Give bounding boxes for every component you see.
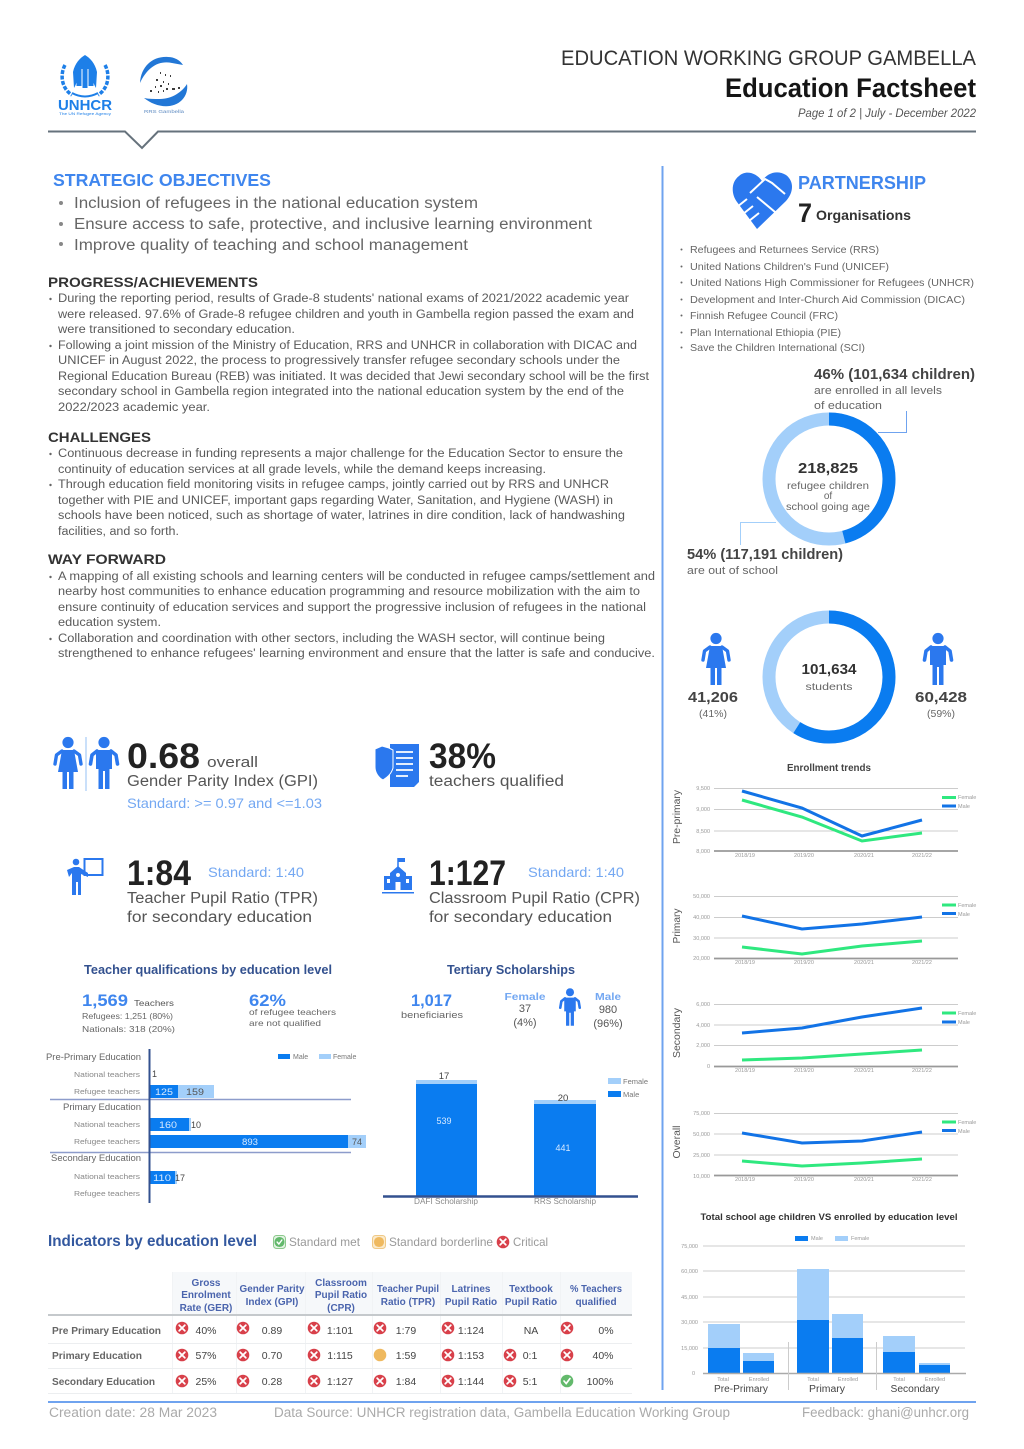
logo: RRS <box>140 57 187 114</box>
table row: pre-primary: 1:124 <box>458 1325 484 1337</box>
table row: primary: 1:115 <box>327 1350 353 1362</box>
text: challenge items: together with PIE and UNICEF, important gaps regarding Water, Sanitation, and Hygiene (WASH) in <box>58 495 613 507</box>
chart: teachers by level and sex: National teachers <box>74 1070 140 1079</box>
donut centre label <box>802 662 856 693</box>
chart: overall trend: 2018/19 <box>735 1177 755 1183</box>
table: indicators <box>48 1272 632 1394</box>
callout: enrolled: of education <box>814 400 882 412</box>
stat: beneficiaries: 1,017 <box>411 991 452 1010</box>
chart: total school age children vs enrolled: 15,000 <box>681 1346 698 1352</box>
donut centre label: school going age <box>786 502 870 513</box>
panel: teacher qualifications <box>46 963 366 1203</box>
icon: handshake heart <box>733 172 792 229</box>
legend: status key: Critical <box>513 1235 548 1249</box>
text: challenge items: facilities, and so forth. <box>58 526 179 538</box>
stat: organisations <box>798 198 911 228</box>
chart: primary trend: 2020/21 <box>854 960 874 966</box>
chart: secondary trend: 2020/21 <box>854 1068 874 1074</box>
icon: female and male <box>55 737 118 791</box>
table header row: Textbook <box>509 1284 553 1295</box>
chart: primary trend: Primary <box>672 908 683 944</box>
chart: pre-primary trend: 2021/22 <box>912 853 932 859</box>
table header row: Latrines <box>452 1284 491 1295</box>
table row: pre-primary: 40% <box>195 1325 217 1337</box>
heading: partnership: PARTNERSHIP <box>798 173 926 193</box>
objectives list: Inclusion of refugees in the national education system <box>74 195 478 212</box>
logo: RRS: RRS Gambella <box>144 109 185 114</box>
table row: secondary <box>52 1375 613 1388</box>
stat: gender parity index <box>55 737 322 811</box>
heading: strategic objectives: STRATEGIC OBJECTIVES <box>53 170 271 190</box>
table header row: Pupil Ratio <box>445 1297 497 1308</box>
stat: male scholars: 980 <box>599 1004 617 1016</box>
table row: primary: 0:1 <box>523 1350 537 1362</box>
chart: scholarship bars: 441 <box>555 1143 571 1153</box>
text: way forward items <box>49 571 655 660</box>
text: progress items <box>49 293 650 414</box>
stat: classroom pupil ratio: for secondary education <box>429 909 612 926</box>
chart: primary trend: Male <box>958 912 970 918</box>
stat: male scholars <box>593 991 623 1030</box>
callout: enrolled: 46% (101,634 children) <box>814 367 975 383</box>
chart: primary trend <box>672 894 976 966</box>
stat: gender parity index: Standard: >= 0.97 and <=1.03 <box>127 795 322 811</box>
table header row: Enrolment <box>181 1290 231 1301</box>
stat: teacher pupil ratio: for secondary education <box>127 909 312 926</box>
callout: enrolled: are enrolled in all levels <box>814 385 943 397</box>
chart: total school age children vs enrolled: Total <box>717 1377 729 1383</box>
stat: female scholars: (4%) <box>513 1017 537 1029</box>
heading: challenges: CHALLENGES <box>48 429 151 445</box>
chart: teachers by level and sex: Refugee teachers <box>74 1087 140 1096</box>
chart: total school age children vs enrolled: Total <box>807 1377 819 1383</box>
stat: teacher pupil ratio: Teacher Pupil Ratio (TPR) <box>127 890 318 907</box>
footer: data source: Data Source: UNHCR registration data, Gambella Education Working Group <box>274 1405 730 1420</box>
chart: teachers by level and sex <box>46 1049 366 1203</box>
chart: teachers by level and sex: Secondary Education <box>51 1153 141 1163</box>
chart: scholarship bars <box>383 1071 648 1206</box>
chart: enrolled vs out of school donut <box>769 419 889 539</box>
objectives list: Improve quality of teaching and school management <box>74 237 469 254</box>
chart: total school age children vs enrolled: Enrolled <box>838 1377 858 1383</box>
stat: female students <box>688 690 738 720</box>
text: way forward items: education system. <box>58 617 161 629</box>
chart: secondary trend: Male <box>958 1020 970 1026</box>
chart: scholarship bars: DAFI Scholarship <box>414 1197 479 1206</box>
callout: out of school: 54% (117,191 children) <box>687 547 843 563</box>
list: partner organisations: United Nations High Commissioner for Refugees (UNHCR) <box>690 277 974 289</box>
bars: primary <box>797 1269 863 1373</box>
chart legend: Female <box>333 1054 356 1061</box>
stat: male scholars: Male <box>595 991 621 1003</box>
stat: unqualified refugee teachers: of refugee teachers <box>249 1007 336 1017</box>
chart: total school age children vs enrolled: 60,000 <box>681 1269 698 1275</box>
callout: out of school: are out of school <box>687 565 778 577</box>
chart legend <box>278 1054 356 1061</box>
chart: overall trend: Female <box>958 1120 976 1126</box>
icon: shield and document <box>375 744 419 787</box>
chart: secondary trend: 4,000 <box>696 1023 710 1029</box>
stat: female students: 41,206 <box>688 690 738 706</box>
heading: enrollment trends: Enrollment trends <box>787 763 871 774</box>
bars: secondary <box>883 1336 950 1373</box>
stat: gender parity index: 0.68 <box>127 737 200 776</box>
text: way forward items: A mapping of all existing schools and learning centers will be conducted in refugee camps/settlement and <box>58 571 655 583</box>
chart: secondary trend: 0 <box>707 1064 710 1070</box>
chart: pre-primary trend: 2019/20 <box>794 853 814 859</box>
chart: students by sex donut <box>769 617 889 737</box>
panel: partnership <box>680 172 974 354</box>
chart: pre-primary trend: 2018/19 <box>735 853 755 859</box>
legend: status key <box>274 1235 548 1249</box>
chart: teachers by level and sex: 160 <box>159 1120 177 1130</box>
text: progress items: 2022/2023 academic year. <box>58 402 210 414</box>
table row: secondary: 25% <box>195 1376 217 1388</box>
text: progress items: Following a joint mission of the Ministry of Education, RRS and UNHCR in collaboration with DICAC and <box>58 340 637 352</box>
table row: secondary: 0.28 <box>262 1376 282 1388</box>
stat: beneficiaries <box>401 991 463 1021</box>
stat: male students: (59%) <box>927 708 955 720</box>
stat: classroom pupil ratio: Classroom Pupil Ratio (CPR) <box>429 890 640 907</box>
chart: overall trend: 2019/20 <box>794 1177 814 1183</box>
icon: school building <box>382 858 414 894</box>
icon: teacher at board <box>67 859 102 895</box>
table row: primary: 40% <box>592 1350 614 1362</box>
stat: organisations: 7 <box>798 198 812 228</box>
title: working group: EDUCATION WORKING GROUP GAMBELLA <box>561 47 976 70</box>
text: progress items: were released. 97.6% of Grade-8 refugee children and youth in Gambella region passed the exam and <box>57 309 634 321</box>
chart: scholarship bars: 539 <box>436 1116 452 1126</box>
chart: teachers by level and sex: 110 <box>153 1173 171 1183</box>
chart: pre-primary trend: 9,000 <box>696 807 710 813</box>
chart: overall trend: 2021/22 <box>912 1177 932 1183</box>
donut centre label: 218,825 <box>798 460 858 477</box>
chart: scholarship bars: 17 <box>439 1071 449 1082</box>
table header row: Gross <box>192 1278 221 1289</box>
list: partner organisations: Refugees and Returnees Service (RRS) <box>690 244 879 256</box>
panel: way forward <box>48 551 655 660</box>
chart: teachers by level and sex: 1 <box>152 1069 157 1079</box>
stat: gender parity index: overall <box>207 754 258 771</box>
chart: primary trend: 40,000 <box>693 915 710 921</box>
chart: total school age children vs enrolled: Pre-Primary <box>714 1384 768 1395</box>
list: partner organisations: Finnish Refugee Council (FRC) <box>690 310 838 322</box>
panel: strategic objectives <box>53 170 593 254</box>
chart: secondary trend: 2019/20 <box>794 1068 814 1074</box>
table row: secondary: Secondary Education <box>52 1376 155 1388</box>
stat: teachers qualified: teachers qualified <box>429 773 564 790</box>
table row: primary: 1:153 <box>458 1350 484 1362</box>
table row: pre-primary: NA <box>524 1325 538 1337</box>
chart: teachers by level and sex: Refugee teachers <box>74 1189 140 1198</box>
chart: total school age children vs enrolled: 0 <box>692 1371 695 1377</box>
table row: primary: 0.70 <box>262 1350 282 1362</box>
donut centre label: students <box>806 681 852 693</box>
panel: school going age donut <box>687 367 975 577</box>
stat: female scholars: Female <box>504 991 546 1003</box>
chart: teachers by level and sex: Refugee teachers <box>74 1137 140 1146</box>
chart: teachers by level and sex: National teachers <box>74 1120 140 1129</box>
table row: secondary: 100% <box>587 1376 613 1388</box>
stat: total teachers: 1,569 <box>82 991 128 1010</box>
chart: teachers by level and sex: Primary Education <box>63 1102 141 1112</box>
stat: male students <box>915 690 967 720</box>
text: progress items: Regional Education Bureau (REB) was initiated. It was decided that Jewi secondary school will be the first <box>58 371 650 383</box>
stat: teacher pupil ratio: 1:84 <box>127 854 191 893</box>
donut centre label: 101,634 <box>802 662 856 678</box>
table row: pre-primary: 0% <box>598 1325 614 1337</box>
stat: female scholars <box>504 991 546 1029</box>
table row: pre-primary: 1:79 <box>396 1325 416 1337</box>
chart: total school age children vs enrolled: Enrolled <box>925 1377 945 1383</box>
chart: scholarship bars: RRS Scholarship <box>534 1197 597 1206</box>
table row: secondary: 5:1 <box>523 1376 537 1388</box>
stat: beneficiaries: beneficiaries <box>401 1010 463 1021</box>
panel: challenges <box>48 429 625 538</box>
chart: primary trend: 30,000 <box>693 936 710 942</box>
chart: overall trend: 75,000 <box>693 1111 710 1117</box>
chart: total school age children vs enrolled: 45,000 <box>681 1295 698 1301</box>
table header row <box>180 1278 622 1314</box>
table header row: (CPR) <box>327 1303 355 1314</box>
table header row: Index (GPI) <box>246 1297 298 1308</box>
list: partner organisations: United Nations Children's Fund (UNICEF) <box>690 261 889 273</box>
callout: out of school <box>687 522 843 577</box>
chart: secondary trend: 2021/22 <box>912 1068 932 1074</box>
heading: teacher qualifications: Teacher qualifications by education level <box>84 963 332 977</box>
table header row: Pupil Ratio <box>505 1297 557 1308</box>
icon: male student <box>924 633 952 685</box>
table header row: Teacher Pupil <box>377 1284 439 1295</box>
text: challenge items: schools have been noticed, such as shortage of water, latrines in dire condition, lack of handwashing <box>58 510 625 522</box>
text: way forward items: strengthened to enhance refugees' learning environment and ensure that the latter is safe and conducive. <box>58 648 655 660</box>
icon: female student <box>703 633 729 685</box>
chart: secondary trend: 6,000 <box>696 1002 710 1008</box>
donut centre label: of <box>824 491 832 502</box>
chart legend: Male <box>811 1236 823 1242</box>
table row: secondary: 1:127 <box>327 1376 353 1388</box>
text: way forward items: nearby host communities to enhance education programming and resource mobilization with the aim to <box>58 586 640 598</box>
chart: pre-primary trend <box>672 786 976 859</box>
table header row: Rate (GER) <box>180 1303 232 1314</box>
table header row: % Teachers <box>570 1284 622 1295</box>
chart: primary trend: 2018/19 <box>735 960 755 966</box>
chart: teachers by level and sex: Pre-Primary Education <box>46 1052 141 1062</box>
objectives list: Ensure access to safe, protective, and inclusive learning environment <box>74 216 593 233</box>
table row: pre-primary <box>52 1322 614 1337</box>
text: challenge items: continuity of education services at all grade levels, while the demand keeps increasing. <box>58 464 546 476</box>
stat: unqualified refugee teachers: are not qualified <box>249 1018 321 1028</box>
stat: teachers qualified <box>375 737 564 790</box>
text: progress items: were transitioned to secondary education. <box>57 324 295 336</box>
stat: classroom pupil ratio: 1:127 <box>429 854 506 893</box>
chart: total school age children vs enrolled <box>681 1212 966 1395</box>
heading: indicators: Indicators by education level <box>48 1233 257 1250</box>
chart: pre-primary trend: Female <box>958 795 976 801</box>
list: partner organisations: Plan International Ethiopia (PIE) <box>690 327 841 339</box>
table row: pre-primary: Pre Primary Education <box>52 1325 161 1337</box>
chart: secondary trend: 2018/19 <box>735 1068 755 1074</box>
chart: scholarship bars: Female <box>623 1077 648 1086</box>
chart: secondary trend: 2,000 <box>696 1043 710 1049</box>
chart: teachers by level and sex: 10 <box>191 1120 201 1130</box>
chart: total school age children vs enrolled: 30,000 <box>681 1320 698 1326</box>
objectives list <box>59 195 593 254</box>
panel: progress and achievements <box>48 274 650 414</box>
stat: teacher pupil ratio <box>67 854 318 926</box>
chart: teachers by level and sex: 17 <box>175 1173 185 1183</box>
stat: total teachers: Refugees: 1,251 (80%) <box>82 1011 173 1021</box>
chart: pre-primary trend: Pre-primary <box>672 790 683 844</box>
chart: secondary trend: Female <box>958 1011 976 1017</box>
list: partner organisations <box>680 244 974 354</box>
stat: gender parity index: Gender Parity Index (GPI) <box>127 773 318 790</box>
chart: secondary trend <box>672 1002 976 1074</box>
text: challenge items: Continuous decrease in funding represents a major challenge for the Education Sector to ensure the <box>58 448 623 460</box>
stat: total teachers: Teachers <box>134 998 174 1008</box>
stat: male students: 60,428 <box>915 690 967 706</box>
table header row: Pupil Ratio <box>315 1290 367 1301</box>
chart: teachers by level and sex: 74 <box>352 1137 362 1147</box>
donut centre label <box>786 460 870 513</box>
chart: teachers by level and sex: 159 <box>186 1087 204 1097</box>
chart: pre-primary trend: 8,500 <box>696 829 710 835</box>
chart: primary trend: 50,000 <box>693 894 710 900</box>
chart: pre-primary trend: Male <box>958 804 970 810</box>
chart: scholarship bars: Male <box>623 1090 639 1099</box>
stat: male scholars: (96%) <box>593 1018 623 1030</box>
legend: status key: Standard borderline <box>389 1235 493 1249</box>
heading: progress: PROGRESS/ACHIEVEMENTS <box>48 274 258 290</box>
subtitle: page and period: Page 1 of 2 | July - December 2022 <box>798 108 977 120</box>
chart: primary trend: Female <box>958 903 976 909</box>
table header row: Classroom <box>315 1278 367 1289</box>
text: challenge items: Through education field monitoring visits in refugee camps, jointly carried out by RRS and UNHCR <box>58 479 609 491</box>
table row: secondary: 1:84 <box>396 1376 416 1388</box>
stat: female students: (41%) <box>699 708 727 720</box>
chart: teachers by level and sex: National teachers <box>74 1172 140 1181</box>
text: challenge items <box>49 448 625 538</box>
chart: overall trend: Overall <box>672 1126 683 1158</box>
table row: primary: 1:59 <box>396 1350 416 1362</box>
logo: UNHCR: UNHCR <box>58 97 112 114</box>
chart: primary trend: 2019/20 <box>794 960 814 966</box>
chart: total school age children vs enrolled: Enrolled <box>749 1377 769 1383</box>
stat: classroom pupil ratio <box>382 854 640 926</box>
table row: primary: 57% <box>195 1350 217 1362</box>
chart: pre-primary trend: 2020/21 <box>854 853 874 859</box>
text: way forward items: Collaboration and coordination with other sectors, including the WASH sector, will continue being <box>58 633 605 645</box>
footer: creation date: Creation date: 28 Mar 2023 <box>49 1405 217 1420</box>
table row: primary: Primary Education <box>52 1350 142 1362</box>
chart: primary trend: 2021/22 <box>912 960 932 966</box>
chart: total school age children vs enrolled: Total <box>893 1377 905 1383</box>
table header row: Gender Parity <box>240 1284 305 1295</box>
chart: total school age children vs enrolled: 75,000 <box>681 1244 698 1250</box>
bars: pre-primary <box>708 1324 774 1373</box>
chart: pre-primary trend: 9,500 <box>696 786 710 792</box>
icon: male figure <box>560 988 580 1026</box>
stat: unqualified refugee teachers <box>249 991 336 1028</box>
panel: indicators by education level <box>48 1233 632 1394</box>
chart: total school age children vs enrolled: Secondary <box>890 1384 940 1395</box>
footer: feedback: Feedback: ghani@unhcr.org <box>802 1405 969 1420</box>
chart: teachers by level and sex: 125 <box>155 1087 173 1097</box>
table header row: qualified <box>575 1297 617 1308</box>
heading: way forward: WAY FORWARD <box>48 551 166 567</box>
chart legend: Female <box>851 1236 869 1242</box>
table row: secondary: 1:144 <box>458 1376 484 1388</box>
list: partner organisations: Development and Inter-Church Aid Commission (DICAC) <box>690 294 965 306</box>
stat: classroom pupil ratio: Standard: 1:40 <box>528 864 624 880</box>
footer <box>48 1402 976 1420</box>
chart: scholarship bars: 20 <box>558 1093 568 1104</box>
text: progress items: UNICEF in August 2022, the process to progressively transfer refugee secondary schools under the <box>58 355 620 367</box>
chart: overall trend <box>672 1111 976 1183</box>
chart: teachers by level and sex: 893 <box>242 1137 258 1147</box>
table row: pre-primary: 1:101 <box>327 1325 353 1337</box>
table row: pre-primary: 0.89 <box>262 1325 282 1337</box>
panel: header <box>48 47 977 148</box>
chart: pre-primary trend: 8,000 <box>696 849 710 855</box>
chart: overall trend: 10,000 <box>693 1174 710 1180</box>
chart: primary trend: 20,000 <box>693 956 710 962</box>
list: partner organisations: Save the Children International (SCI) <box>690 342 865 354</box>
callout: enrolled <box>814 367 975 432</box>
chart title: Total school age children VS enrolled by education level <box>700 1212 958 1223</box>
stat: teacher pupil ratio: Standard: 1:40 <box>208 864 304 880</box>
donut centre label: refugee children <box>787 481 869 492</box>
table row: primary <box>52 1349 614 1362</box>
stat: organisations: Organisations <box>816 207 911 223</box>
chart: total school age children vs enrolled: Primary <box>809 1384 845 1395</box>
panel: tertiary scholarships <box>383 963 648 1206</box>
text: progress items: During the reporting period, results of Grade-8 students' national exams of 2021/2022 academic year <box>58 293 629 305</box>
chart: overall trend: 2020/21 <box>854 1177 874 1183</box>
chart: overall trend: Male <box>958 1129 970 1135</box>
stat: unqualified refugee teachers: 62% <box>249 991 286 1010</box>
stat: female scholars: 37 <box>519 1003 531 1015</box>
header rule with pointer <box>48 132 976 148</box>
chart: secondary trend: Secondary <box>672 1008 683 1058</box>
text: progress items: secondary school in Gambella region integrated into the national education system by the end of the <box>58 386 624 398</box>
legend: status key: Standard met <box>289 1235 361 1249</box>
panel: students by sex donut <box>688 617 967 737</box>
logo: UNHCR <box>58 55 112 116</box>
stat: total teachers <box>82 991 175 1034</box>
heading: tertiary scholarships: Tertiary Scholarships <box>447 963 575 977</box>
chart legend <box>795 1236 869 1242</box>
chart legend: Male <box>293 1054 308 1061</box>
chart: overall trend: 25,000 <box>693 1153 710 1159</box>
stat: teachers qualified: 38% <box>429 737 496 776</box>
chart: overall trend: 50,000 <box>693 1132 710 1138</box>
stat: total teachers: Nationals: 318 (20%) <box>82 1024 175 1034</box>
text: way forward items: ensure continuity of education services and support the progressive inclusion of refugees in the national <box>58 602 646 614</box>
logo: UNHCR: The UN Refugee Agency <box>59 111 111 116</box>
table header row: Ratio (TPR) <box>381 1297 435 1308</box>
title: Education Factsheet: Education Factsheet <box>725 73 976 103</box>
